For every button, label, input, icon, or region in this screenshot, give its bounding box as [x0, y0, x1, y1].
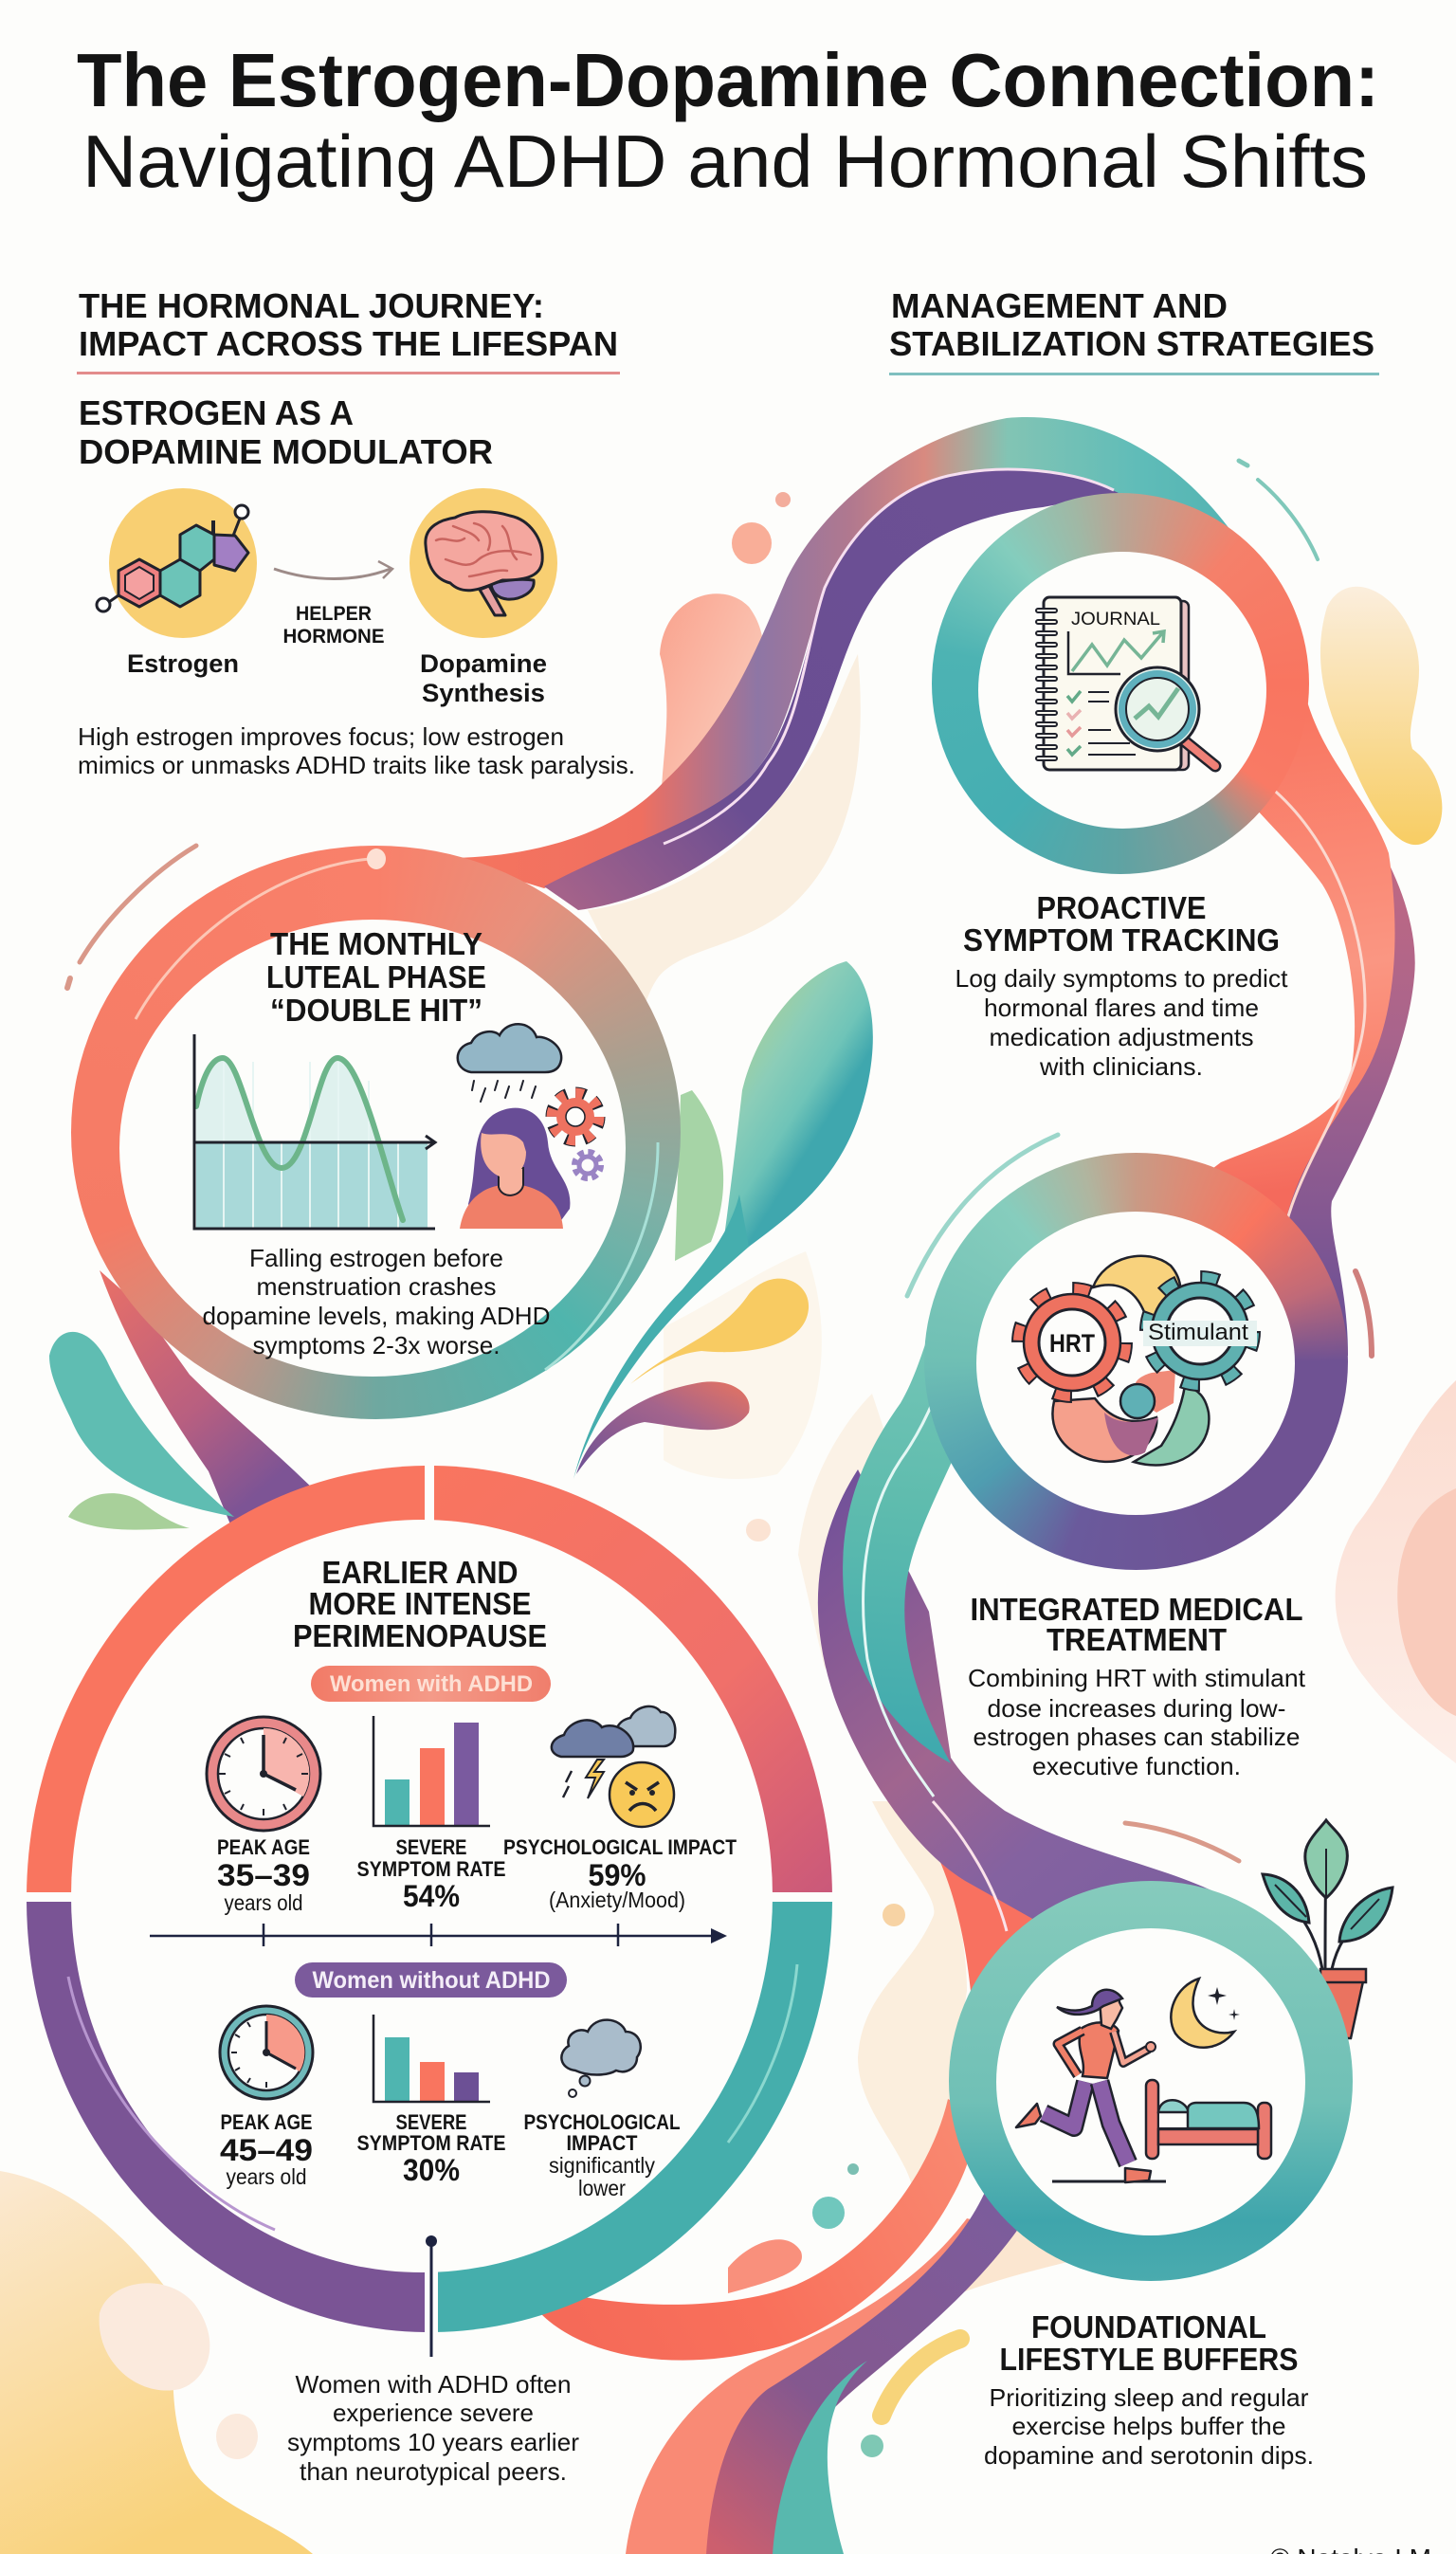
heading: double hit: THE MONTHLY [270, 926, 482, 961]
heading: modulator: DOPAMINE MODULATOR [79, 432, 493, 471]
stat: psychological impact without ADHD: IMPACT [567, 2131, 638, 2155]
icon: clock without ADHD [220, 2006, 313, 2099]
main title [77, 38, 1379, 203]
text: integrated medical treatment [968, 1592, 1306, 1780]
pill: women without ADHD [295, 1962, 567, 1998]
panel: estrogen as a dopamine modulator [78, 393, 635, 779]
stat: psychological impact ADHD: PSYCHOLOGICAL IMPACT [503, 1835, 737, 1859]
stat: psychological impact ADHD: 59% [588, 1858, 646, 1892]
moon and stars [1171, 1979, 1240, 2048]
section heading: hormonal journey: IMPACT ACROSS THE LIFESPAN [79, 324, 618, 363]
icon: brain [410, 488, 557, 638]
main title: The Estrogen-Dopamine Connection: [77, 38, 1379, 122]
panel: luteal phase content [194, 926, 600, 1359]
stat: peak age without ADHD: years old [226, 2164, 307, 2189]
stat: severe symptom rate without ADHD [356, 2110, 506, 2187]
label: dopamine synthesis: Dopamine [420, 649, 547, 678]
text: proactive symptom tracking: PROACTIVE [1037, 890, 1206, 925]
stat: psychological impact ADHD: (Anxiety/Mood) [549, 1888, 685, 1912]
icon: gears and swirl [1021, 1256, 1257, 1465]
body text: modulator: mimics or unmasks ADHD traits like task paralysis. [78, 751, 635, 779]
callout pin [425, 2235, 438, 2357]
ribbon: top right descending, purple [1276, 758, 1415, 1356]
pill: women with ADHD: Women with ADHD [330, 1671, 533, 1697]
body text: modulator [78, 722, 635, 779]
ring: luteal phase [71, 846, 681, 1419]
icon: journal with magnifier [1038, 597, 1215, 770]
ribbon: purple lower band [706, 2190, 1019, 2554]
label: dopamine synthesis [420, 649, 547, 707]
text: foundational lifestyle buffers [984, 2309, 1314, 2470]
stat: severe symptom rate without ADHD: SEVERE [396, 2110, 466, 2134]
text: integrated medical treatment: executive function. [1032, 1752, 1241, 1780]
ribbon: coral lower band [540, 2099, 976, 2361]
text: integrated medical treatment: dose increases during low- [988, 1694, 1285, 1723]
bed [1146, 2080, 1271, 2159]
arrow: timeline axis [150, 1924, 727, 1946]
ribbon: teal lower band [773, 2361, 867, 2554]
ring: medical treatment [924, 1153, 1348, 1570]
icon: storm clouds and angry face [552, 1706, 675, 1827]
chart: severe symptom without ADHD [373, 2015, 490, 2102]
ribbon: coral descending [1166, 664, 1395, 1270]
text: proactive symptom tracking: SYMPTOM TRACKING [963, 922, 1280, 958]
stat: peak age ADHD [217, 1835, 310, 1915]
stat: psychological impact without ADHD [523, 2110, 681, 2200]
ring: symptom tracking [932, 493, 1309, 874]
stat: severe symptom rate ADHD [356, 1835, 506, 1913]
stat: peak age without ADHD: 45–49 [220, 2133, 313, 2167]
ring: perimenopause [19, 1466, 836, 2332]
callout text: 10 years earlier: symptoms 10 years earlier [287, 2428, 579, 2456]
stat: severe symptom rate without ADHD: SYMPTOM RATE [356, 2131, 506, 2155]
stat: psychological impact without ADHD: significantly [549, 2153, 655, 2178]
heading: double hit: LUTEAL PHASE [266, 959, 486, 994]
label: dopamine synthesis: Synthesis [422, 679, 545, 707]
stat: peak age without ADHD [220, 2110, 313, 2189]
main title: Navigating ADHD and Hormonal Shifts [82, 119, 1368, 203]
stat: peak age without ADHD: PEAK AGE [220, 2110, 313, 2134]
text: integrated medical treatment: Combining HRT with stimulant [968, 1664, 1306, 1692]
arrow: estrogen to dopamine [274, 561, 392, 578]
stat: psychological impact ADHD [503, 1835, 737, 1912]
chart: estrogen wave [194, 1034, 435, 1229]
pill: women with ADHD [311, 1666, 551, 1702]
label: helper hormone [282, 603, 385, 648]
gear: Stimulant: Stimulant [1148, 1320, 1248, 1345]
decorative dots and arcs [67, 461, 1372, 2457]
text: foundational lifestyle buffers: FOUNDATIONAL [1031, 2309, 1266, 2344]
body text: luteal: Falling estrogen before [249, 1244, 503, 1272]
stat: severe symptom rate without ADHD: 30% [403, 2153, 460, 2187]
ribbon: teal S-curve [843, 1218, 1033, 1763]
icon: potted plant [1263, 1820, 1392, 2038]
body text: luteal: dopamine levels, making ADHD [203, 1302, 550, 1330]
heading: perimenopause: EARLIER AND [322, 1555, 518, 1590]
text: integrated medical treatment: estrogen phases can stabilize [973, 1723, 1301, 1751]
callout text: 10 years earlier: experience severe [333, 2399, 534, 2427]
text: foundational lifestyle buffers: Prioritizing sleep and regular [990, 2383, 1309, 2412]
label: helper hormone: HELPER [296, 603, 372, 625]
leaves right [573, 961, 873, 1479]
gear: HRT: HRT [1049, 1329, 1095, 1358]
stat: severe symptom rate ADHD: 54% [403, 1879, 460, 1913]
stat: severe symptom rate ADHD: SYMPTOM RATE [356, 1857, 506, 1881]
body text: modulator: High estrogen improves focus; low estrogen [78, 722, 564, 751]
section heading: management: MANAGEMENT AND [891, 286, 1228, 325]
section heading: management: STABILIZATION STRATEGIES [889, 324, 1374, 363]
chart: severe symptom ADHD [373, 1716, 490, 1826]
stat: peak age ADHD: years old [224, 1890, 303, 1915]
section heading: management [889, 286, 1379, 375]
ribbon: purple S-curve [818, 1469, 1242, 1925]
text: proactive symptom tracking: with clinicians. [1039, 1052, 1203, 1081]
icon: journal with magnifier: JOURNAL [1071, 610, 1160, 629]
ribbon: coral wedge [924, 1830, 1043, 2000]
body text: luteal: menstruation crashes [256, 1272, 497, 1301]
heading: perimenopause: PERIMENOPAUSE [293, 1618, 547, 1653]
runner [1016, 1990, 1166, 2182]
text: foundational lifestyle buffers: dopamine and serotonin dips. [984, 2441, 1314, 2470]
heading: perimenopause: MORE INTENSE [309, 1586, 531, 1621]
body text: luteal: symptoms 2-3x worse. [252, 1331, 500, 1359]
panel: perimenopause content [150, 1555, 737, 2200]
ribbon: top mauve to teal arch [446, 417, 1303, 888]
gear: Stimulant [1143, 1280, 1257, 1382]
icon: runner, moon and bed [1016, 1979, 1271, 2182]
text: foundational lifestyle buffers: LIFESTYLE BUFFERS [999, 2342, 1299, 2377]
body text: luteal [203, 1244, 550, 1359]
text: proactive symptom tracking: medication adjustments [990, 1023, 1253, 1051]
heading: double hit: “DOUBLE HIT” [270, 993, 482, 1028]
stat: peak age ADHD: PEAK AGE [217, 1835, 310, 1859]
callout text: 10 years earlier: Women with ADHD often [296, 2370, 571, 2399]
heading: modulator [79, 393, 493, 471]
icon: thought cloud [561, 2020, 641, 2097]
text: proactive symptom tracking: Log daily symptoms to predict [956, 964, 1288, 993]
text: proactive symptom tracking: hormonal flares and time [984, 994, 1259, 1022]
section heading: hormonal journey [77, 286, 620, 374]
heading: modulator: ESTROGEN AS A [79, 393, 354, 432]
gear: HRT [1021, 1291, 1123, 1394]
stat: psychological impact without ADHD: lower [578, 2176, 626, 2200]
pill: women without ADHD: Women without ADHD [313, 1967, 550, 1994]
ring: lifestyle buffers [949, 1881, 1353, 2281]
icon: purple gear [575, 1153, 600, 1177]
stat: severe symptom rate ADHD: SEVERE [396, 1835, 466, 1859]
leaves left [49, 1270, 322, 1541]
ribbon: purple arch [544, 469, 1119, 910]
icon: estrogen molecule [97, 488, 257, 638]
stat: psychological impact without ADHD: PSYCHOLOGICAL [523, 2110, 681, 2134]
icon: overwhelmed woman [460, 1108, 570, 1229]
icon: coral gear [553, 1094, 598, 1140]
swirl shapes [1052, 1256, 1209, 1465]
heading: perimenopause [293, 1555, 547, 1653]
stat: peak age ADHD: 35–39 [217, 1858, 310, 1892]
icon: clock ADHD [207, 1717, 320, 1831]
callout text: 10 years earlier [287, 2370, 579, 2486]
label: helper hormone: HORMONE [282, 626, 385, 648]
text: foundational lifestyle buffers: exercise helps buffer the [1012, 2412, 1285, 2440]
text: integrated medical treatment: INTEGRATED MEDICAL [971, 1592, 1302, 1627]
text: integrated medical treatment: TREATMENT [1046, 1622, 1227, 1657]
section heading: hormonal journey: THE HORMONAL JOURNEY: [79, 286, 544, 325]
callout text: 10 years earlier: than neurotypical peers. [300, 2457, 567, 2486]
label: estrogen: Estrogen [127, 649, 239, 678]
background blobs [0, 587, 1456, 2554]
icon: rain cloud [458, 1024, 561, 1102]
ribbon: coral second band [626, 2218, 1005, 2554]
text: proactive symptom tracking [956, 890, 1288, 1081]
heading: double hit [266, 926, 486, 1028]
